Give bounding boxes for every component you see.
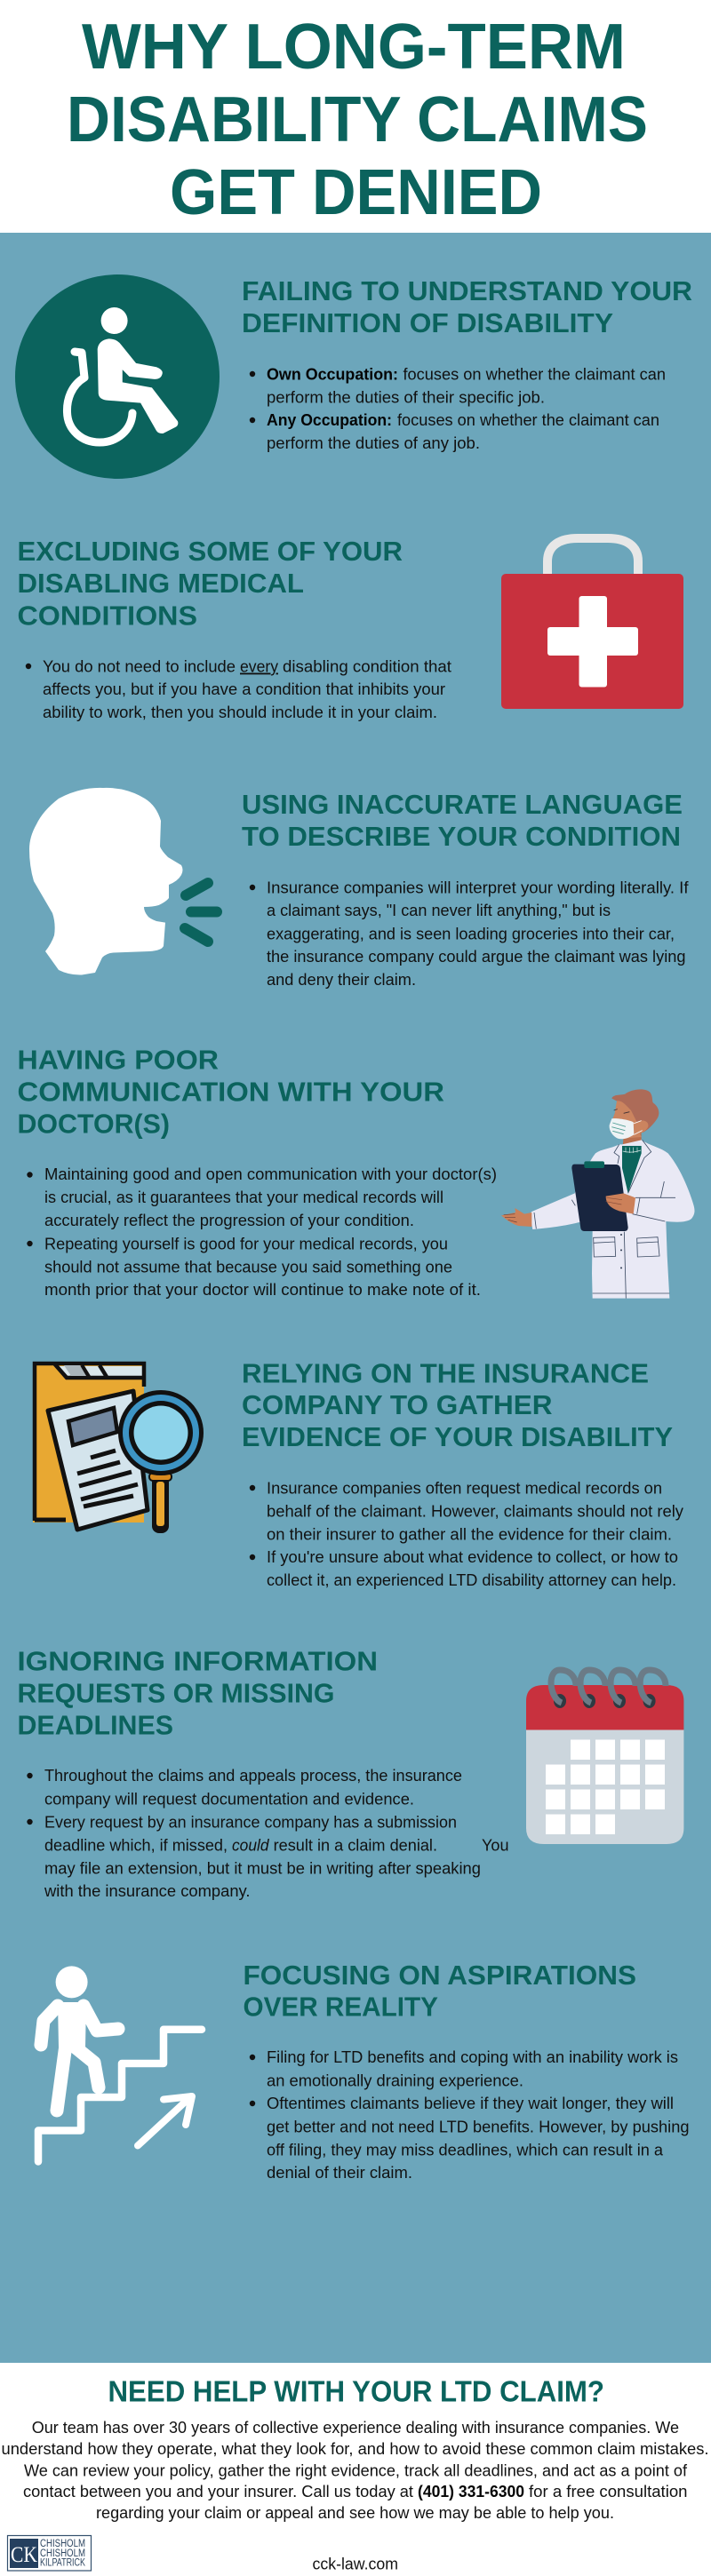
text block: bullets: result in a claim denial.	[274, 1835, 437, 1855]
heading	[18, 1045, 444, 1139]
heading	[18, 536, 403, 631]
heading: COMMUNICATION WITH YOUR	[18, 1077, 444, 1107]
text block: bullets: You do not need to include	[43, 657, 236, 675]
logo: Chisholm Chisholm Kilpatrick: CK	[11, 2543, 37, 2567]
text block: bullets: Throughout the claims and appeals process, the insurance	[44, 1766, 462, 1785]
text block: contact paragraph: regarding your claim or appeal and see how we may be able to help you.	[96, 2503, 614, 2522]
text block: bullets: off filing, they may miss deadlines, which can result in a	[267, 2141, 664, 2159]
heading: DOCTOR(S)	[18, 1109, 170, 1139]
text block: bullets: perform the duties of their specific job.	[267, 387, 545, 407]
heading: USING INACCURATE LANGUAGE	[242, 789, 683, 820]
icon: doctor with clipboard	[501, 1089, 694, 1299]
text block: contact paragraph: Our team has over 30 years of collective experience dealing with insurance companies. We	[32, 2418, 679, 2437]
text block: bullets: is crucial, as it guarantees that your medical records will	[44, 1188, 443, 1206]
text block: bullets: Maintaining good and open communication with your doctor(s)	[44, 1165, 497, 1183]
text block: bullets: Any Occupation:	[267, 410, 392, 429]
text block: bullets: Repeating yourself is good for your medical records, you	[44, 1235, 448, 1252]
text block: bullets: an emotionally draining experience.	[267, 2071, 523, 2089]
text block: bullets: Insurance companies often request medical records on	[267, 1478, 662, 1498]
text block: bullets: denial of their claim.	[267, 2163, 412, 2182]
text block: bullets: perform the duties of any job.	[267, 433, 480, 452]
heading: EXCLUDING SOME OF YOUR	[18, 536, 403, 567]
logo: Chisholm Chisholm Kilpatrick: KILPATRICK	[40, 2558, 85, 2569]
heading: FAILING TO UNDERSTAND YOUR	[242, 275, 692, 306]
text block: bullets	[250, 2047, 690, 2182]
heading: FOCUSING ON ASPIRATIONS	[244, 1960, 636, 1991]
text block: bullets: Insurance companies will interpret your wording literally. If	[267, 878, 689, 897]
text block: bullets	[250, 878, 689, 989]
title	[67, 12, 648, 228]
website: cck-law.com	[313, 2555, 398, 2572]
text block: bullets: a claimant says, "I can never lift anything," but is	[267, 901, 611, 919]
text block: bullets: with the insurance company.	[44, 1881, 251, 1900]
logo: Chisholm Chisholm Kilpatrick: CHISHOLM	[40, 2548, 85, 2559]
text block: bullets: could	[232, 1835, 269, 1855]
heading	[18, 1646, 378, 1741]
icon: medical kit	[501, 538, 683, 709]
text block: bullets: Oftentimes claimants believe if they wait longer, they will	[267, 2094, 674, 2112]
icon: speaking head	[29, 788, 217, 975]
heading: HAVING POOR	[18, 1045, 219, 1075]
heading	[244, 1960, 636, 2022]
heading	[242, 789, 683, 852]
text block: bullets: disabling condition that	[283, 657, 451, 675]
heading: REQUESTS OR MISSING	[18, 1677, 334, 1709]
icon: folder with magnifying glass	[33, 1362, 204, 1533]
section: aspirations over reality	[38, 1960, 690, 2182]
section: inaccurate language	[29, 788, 689, 989]
logo: Chisholm Chisholm Kilpatrick	[7, 2535, 91, 2571]
text block: bullets: If you're unsure about what evidence to collect, or how to	[267, 1547, 678, 1566]
title: DISABILITY CLAIMS	[67, 84, 648, 155]
title: GET DENIED	[170, 157, 542, 228]
heading: DEFINITION OF DISABILITY	[242, 307, 613, 338]
heading: COMPANY TO GATHER	[242, 1389, 553, 1420]
icon: wheelchair in circle	[15, 274, 220, 479]
heading: OVER REALITY	[244, 1992, 438, 2022]
text block: bullets: the insurance company could argue the claimant was lying	[267, 947, 686, 966]
text block: bullets: and deny their claim.	[267, 970, 416, 989]
heading: IGNORING INFORMATION	[18, 1646, 378, 1677]
heading: CONDITIONS	[18, 600, 197, 631]
text block: bullets: ability to work, then you should include it in your claim.	[43, 703, 437, 721]
heading: TO DESCRIBE YOUR CONDITION	[242, 821, 681, 852]
text block: bullets: focuses on whether the claimant can	[403, 364, 666, 384]
text block: bullets: collect it, an experienced LTD disability attorney can help.	[267, 1570, 676, 1589]
text block: contact paragraph: understand how they operate, what they look for, and how to avoid these common claim mistakes.	[2, 2439, 709, 2458]
text block: bullets: deadline which, if missed,	[44, 1835, 228, 1855]
text block: contact paragraph: contact between you and your insurer. Call us today at	[23, 2482, 413, 2500]
text block: bullets: get better and not need LTD benefits. However, by pushing	[267, 2118, 690, 2135]
heading: DEADLINES	[18, 1709, 173, 1741]
text block: bullets: company will request documentation and evidence.	[44, 1789, 414, 1809]
heading	[242, 275, 692, 338]
heading: NEED HELP WITH YOUR LTD CLAIM?	[108, 2375, 604, 2407]
text block: bullets: focuses on whether the claimant can	[397, 410, 659, 429]
icon: person climbing stairs	[38, 1966, 202, 2162]
heading: EVIDENCE OF YOUR DISABILITY	[242, 1421, 673, 1452]
text block: contact paragraph	[2, 2418, 709, 2522]
text block: bullets: month prior that your doctor will continue to make note of it.	[44, 1280, 481, 1299]
text block: bullets: should not assume that because you said something one	[44, 1258, 452, 1276]
footer: call to action	[2, 2375, 709, 2572]
text block: bullets: Own Occupation:	[267, 364, 398, 384]
text block: bullets: affects you, but if you have a condition that inhibits your	[43, 680, 445, 698]
text block: bullets: You	[482, 1835, 508, 1855]
text block: bullets: exaggerating, and is seen loading groceries into their car,	[267, 924, 675, 943]
text block: bullets	[27, 1766, 509, 1900]
title: WHY LONG-TERM	[82, 12, 626, 83]
icon: calendar	[526, 1670, 683, 1844]
heading	[242, 1357, 673, 1452]
section: poor communication with doctor	[18, 1045, 694, 1299]
heading: DISABLING MEDICAL	[18, 568, 304, 599]
text block: contact paragraph: We can review your policy, gather the right evidence, track all deadlines, and act as a point of	[24, 2461, 688, 2480]
logo: Chisholm Chisholm Kilpatrick: CHISHOLM	[40, 2539, 85, 2549]
text block: bullets: may file an extension, but it must be in writing after speaking	[44, 1859, 481, 1878]
text block: contact paragraph: for a free consultation	[529, 2482, 688, 2500]
text block: bullets	[250, 364, 666, 452]
text block: bullets: Filing for LTD benefits and coping with an inability work is	[267, 2047, 678, 2066]
section: definition of disability	[15, 274, 692, 479]
text block: bullets	[250, 1478, 684, 1589]
text block: bullets: Every request by an insurance company has a submission	[44, 1812, 457, 1832]
section: excluding medical conditions	[18, 536, 683, 721]
text block: bullets: on their insurer to gather all the evidence for their claim.	[267, 1524, 672, 1544]
text block: contact paragraph: (401) 331-6300	[418, 2482, 524, 2500]
text block: bullets: accurately reflect the progression of your condition.	[44, 1211, 414, 1229]
text block: bullets	[26, 657, 451, 721]
text block: bullets	[27, 1165, 497, 1299]
text block: bullets: behalf of the claimant. However, claimants should not rely	[267, 1501, 684, 1521]
heading: RELYING ON THE INSURANCE	[242, 1357, 649, 1389]
text block: bullets: every	[240, 657, 279, 675]
section: ignoring requests or deadlines	[18, 1646, 683, 1900]
section: relying on insurer for evidence	[33, 1357, 684, 1589]
